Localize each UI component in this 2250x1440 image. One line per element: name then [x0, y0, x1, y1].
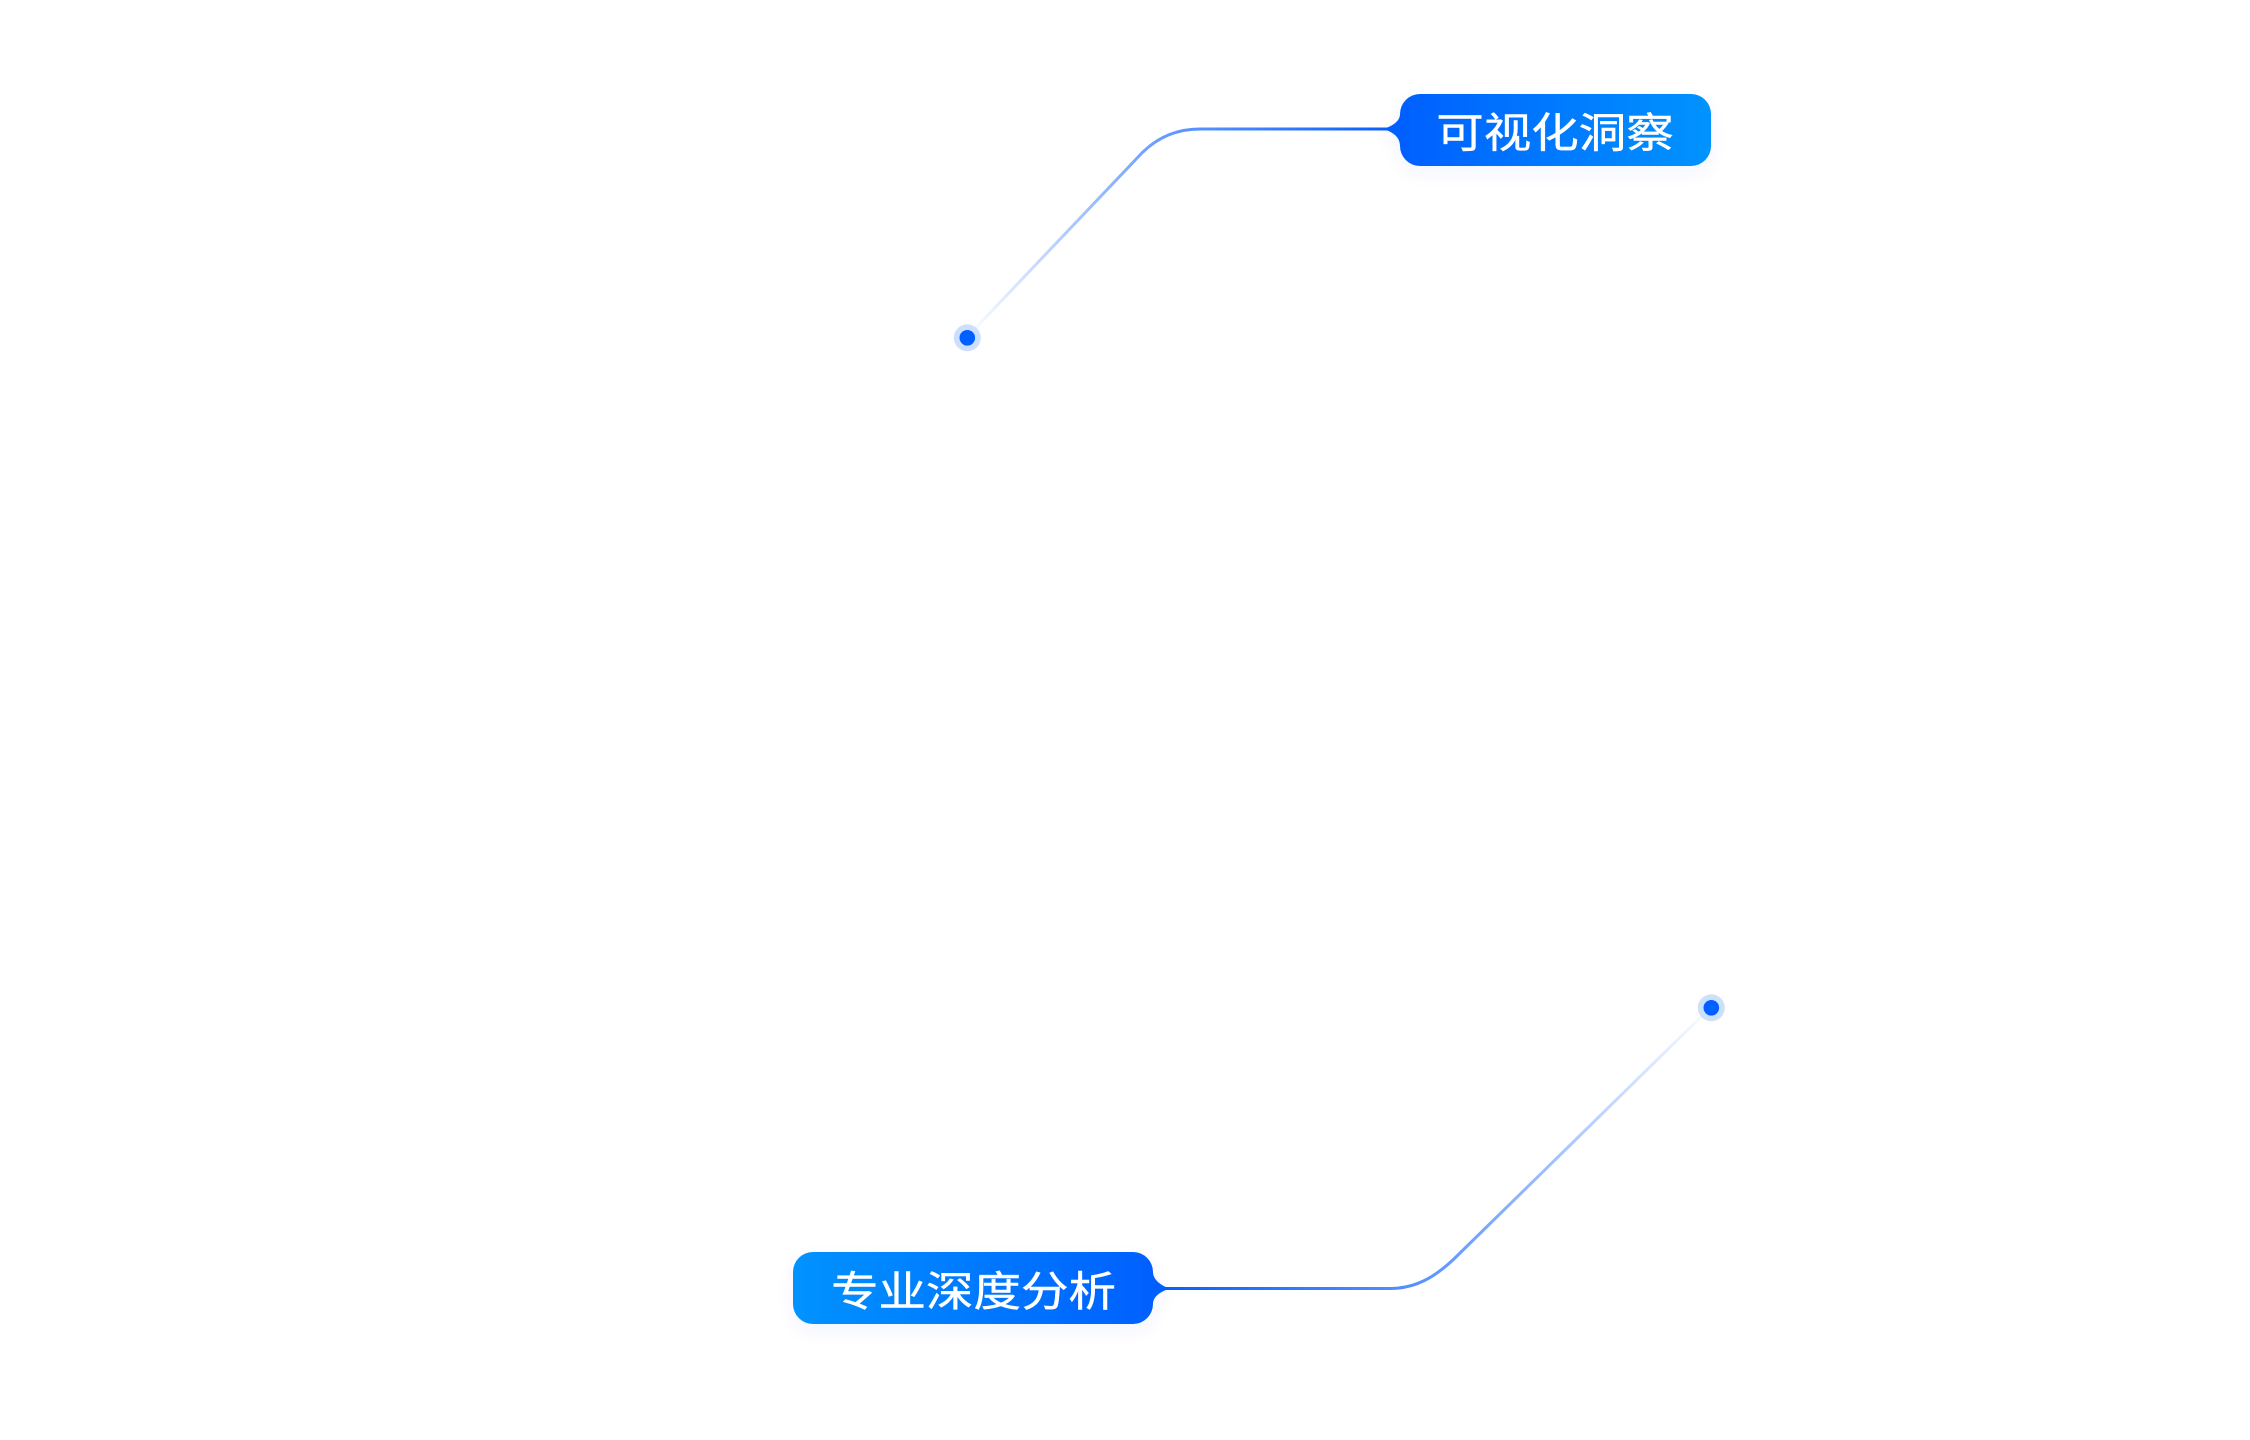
callout: 可视化洞察: [1383, 94, 1711, 166]
arrow: connector from top dot to top label: [967, 129, 1390, 337]
heading: 专业深度分析: 专业深度分析: [831, 1270, 1116, 1315]
icon: top anchor dot: [954, 324, 981, 351]
heading: 可视化洞察: 可视化洞察: [1436, 111, 1674, 157]
callout: 专业深度分析: [793, 1252, 1170, 1324]
icon: bottom anchor dot: [1698, 994, 1725, 1021]
arrow: connector from bottom dot to bottom label: [1160, 1007, 1711, 1288]
